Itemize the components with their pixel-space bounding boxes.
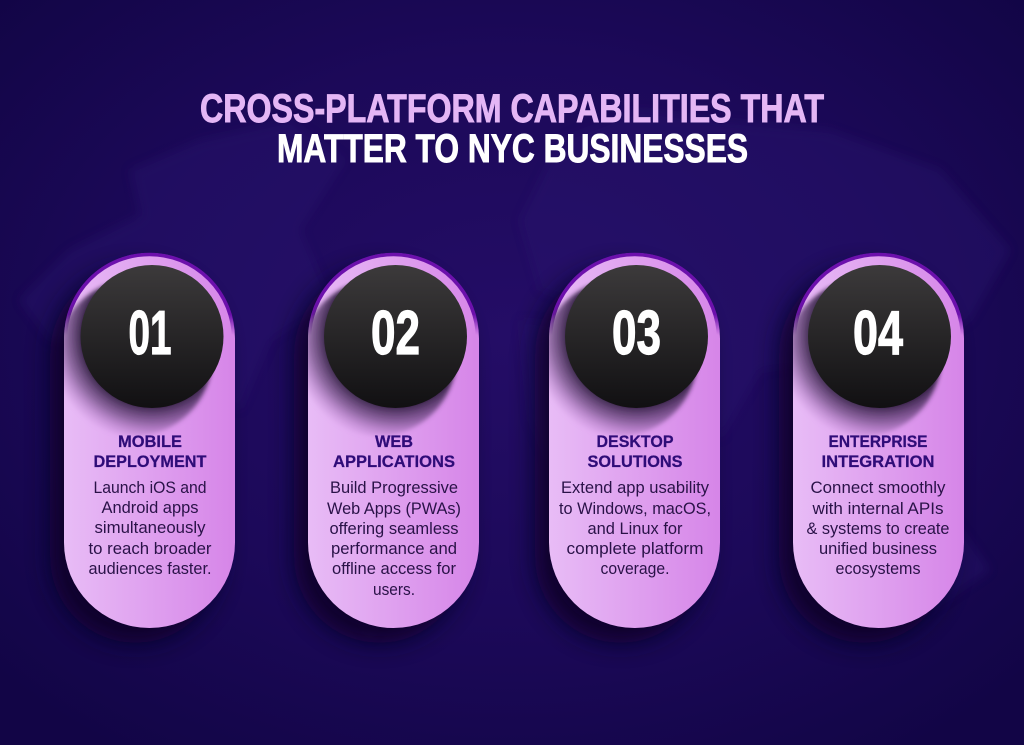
title: [200, 87, 824, 171]
heading: [588, 432, 682, 471]
description: users.: [373, 581, 415, 599]
description: simultaneously: [94, 519, 206, 537]
title: CROSS-PLATFORM CAPABILITIES THAT: [200, 87, 824, 131]
number badge 03: 03: [612, 299, 661, 368]
description: to Windows, macOS,: [559, 500, 711, 518]
heading: DESKTOP: [596, 432, 674, 451]
heading: WEB: [375, 432, 413, 451]
world map silhouette: [20, 110, 1010, 640]
heading: APPLICATIONS: [333, 452, 455, 471]
description: Build Progressive: [330, 479, 458, 497]
number badge 01: [80, 265, 224, 408]
heading: INTEGRATION: [822, 452, 934, 471]
description: [806, 479, 950, 578]
number badge 03: [565, 265, 708, 408]
panel: mobile deployment: [50, 253, 235, 643]
description: Web Apps (PWAs): [327, 500, 461, 518]
description: coverage.: [600, 560, 670, 578]
panel: desktop solutions: [535, 253, 720, 643]
number badge 02: [324, 265, 467, 408]
description: performance and: [331, 540, 457, 558]
description: [327, 479, 461, 599]
heading: MOBILE: [118, 432, 182, 451]
panel: enterprise integration: [779, 253, 964, 643]
description: offline access for: [332, 560, 456, 578]
heading: ENTERPRISE: [828, 432, 928, 451]
description: Android apps: [102, 499, 198, 517]
description: offering seamless: [330, 520, 458, 538]
heading: [94, 432, 207, 471]
description: Extend app usability: [561, 479, 710, 497]
number badge 02: 02: [371, 299, 420, 368]
description: Connect smoothly: [810, 479, 946, 497]
description: with internal APIs: [811, 500, 944, 518]
heading: SOLUTIONS: [588, 452, 682, 471]
panel: web applications: [294, 253, 479, 643]
description: complete platform: [566, 540, 704, 558]
number badge 04: 04: [853, 299, 903, 368]
description: [88, 479, 212, 578]
description: & systems to create: [806, 520, 950, 538]
description: and Linux for: [588, 520, 683, 538]
description: ecosystems: [836, 560, 920, 578]
title: MATTER TO NYC BUSINESSES: [277, 127, 748, 171]
description: to reach broader: [88, 540, 212, 558]
heading: DEPLOYMENT: [94, 452, 207, 471]
number badge 04: [808, 265, 951, 408]
heading: [333, 432, 455, 471]
description: audiences faster.: [88, 560, 212, 578]
description: unified business: [819, 540, 937, 558]
heading: [822, 432, 934, 471]
number badge 01: 01: [128, 299, 172, 368]
description: Launch iOS and: [94, 479, 206, 497]
description: [559, 479, 711, 578]
